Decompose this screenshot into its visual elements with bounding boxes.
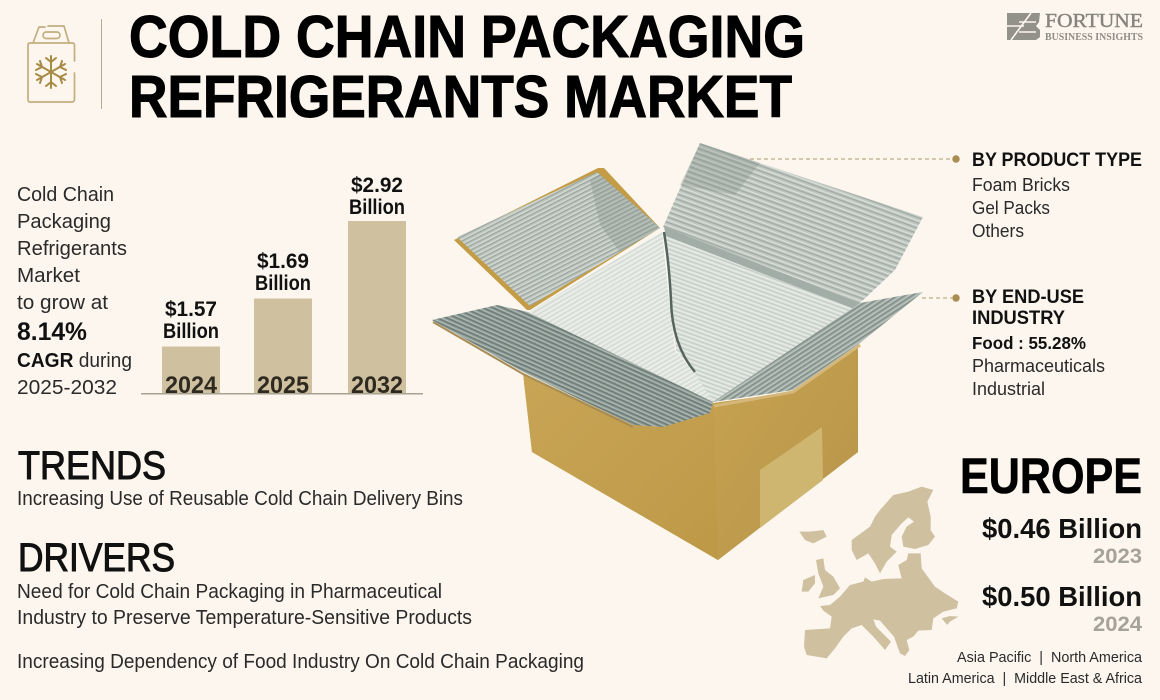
icon: package with snowflake <box>28 26 74 102</box>
drivers section: Increasing Dependency of Food Industry On Cold Chain Packaging <box>17 651 584 673</box>
drivers section <box>17 536 584 673</box>
bar chart: 2032 <box>351 372 403 399</box>
growth text block: CAGR during <box>17 350 132 372</box>
title: REFRIGERANTS MARKET <box>129 64 792 130</box>
callout: by product type <box>750 150 1142 241</box>
growth text block: 2025-2032 <box>17 377 117 399</box>
bar chart: Billion <box>349 195 405 219</box>
illustration: open insulated box <box>432 143 923 560</box>
regional stats: Europe: 2023 <box>1093 545 1142 568</box>
other regions list: Asia Pacific | North America <box>957 649 1143 666</box>
callout: by end-use industry <box>922 287 1105 399</box>
regional stats: Europe: $0.46 Billion <box>982 513 1142 544</box>
bar chart: $1.57 <box>165 297 217 321</box>
other regions list: Latin America | Middle East & Africa <box>908 670 1143 687</box>
logo: Fortune Business Insights: FORTUNE <box>1045 11 1143 32</box>
callout: by product type: Gel Packs <box>972 197 1050 218</box>
bar chart: 2024 <box>165 372 218 399</box>
title: COLD CHAIN PACKAGING <box>129 4 805 70</box>
callout: by end-use industry: BY END-USE <box>972 287 1084 308</box>
bar chart: $1.69 <box>257 249 309 273</box>
callout: by end-use industry: INDUSTRY <box>972 308 1065 329</box>
callout: by product type: Others <box>972 220 1024 241</box>
vertical divider <box>101 19 102 109</box>
growth text block: Packaging <box>17 211 111 233</box>
bar chart: 2025 <box>257 372 309 399</box>
growth text block: to grow at <box>17 292 108 314</box>
drivers section: Industry to Preserve Temperature-Sensitive Products <box>17 607 472 629</box>
trends section: Increasing Use of Reusable Cold Chain Delivery Bins <box>17 488 463 510</box>
title <box>129 4 805 130</box>
callout: by product type: Foam Bricks <box>972 174 1070 195</box>
bar chart <box>141 173 423 399</box>
regional stats: Europe: $0.50 Billion <box>982 581 1142 612</box>
growth text block: Cold Chain <box>17 184 114 206</box>
trends section: TRENDS <box>18 444 166 488</box>
bar chart: Billion <box>255 271 311 295</box>
trends section <box>17 444 463 510</box>
drivers section: DRIVERS <box>18 536 175 580</box>
bar chart: Billion <box>163 319 219 343</box>
growth text block: Refrigerants <box>17 238 127 260</box>
callout: by end-use industry: Industrial <box>972 378 1045 399</box>
growth text block <box>17 184 132 399</box>
growth text block: Market <box>17 265 80 287</box>
regional stats: Europe <box>960 448 1142 636</box>
drivers section: Need for Cold Chain Packaging in Pharmaceutical <box>17 581 442 603</box>
map: Europe <box>799 487 958 658</box>
logo: Fortune Business Insights <box>1007 11 1143 43</box>
bar chart: $2.92 <box>351 173 403 197</box>
callout: by product type: BY PRODUCT TYPE <box>972 150 1142 171</box>
regional stats: Europe: 2024 <box>1093 613 1142 636</box>
logo: Fortune Business Insights: BUSINESS INSIGHTS <box>1045 32 1143 43</box>
other regions list <box>908 649 1143 687</box>
callout: by end-use industry: Food : 55.28% <box>972 333 1086 353</box>
callout: by end-use industry: Pharmaceuticals <box>972 355 1105 376</box>
growth text block: 8.14% <box>17 318 87 346</box>
